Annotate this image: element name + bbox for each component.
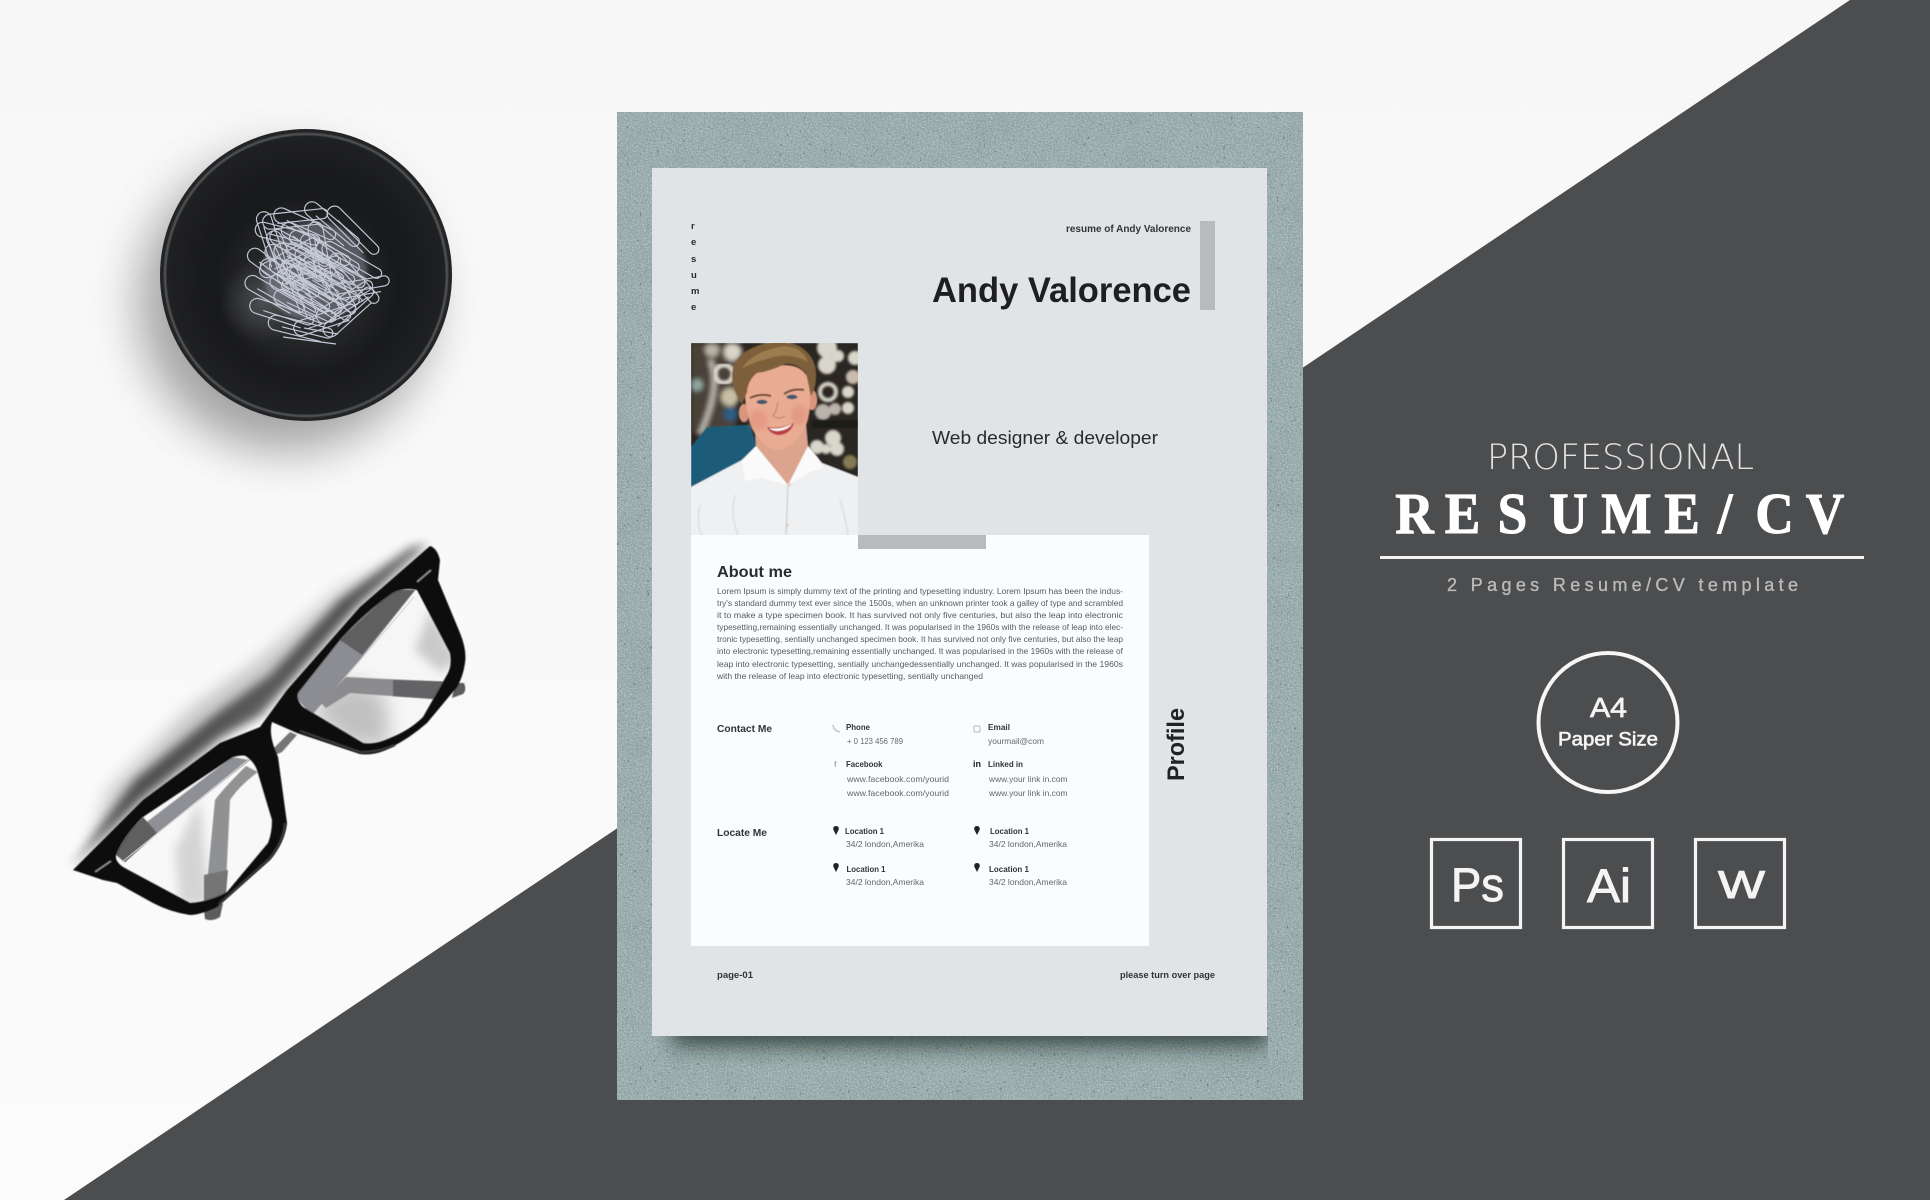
rivet highlights xyxy=(95,570,431,872)
vertical resume label: u xyxy=(691,270,697,281)
icon: pin 2 xyxy=(974,826,980,835)
lens shading and temple arms: left xyxy=(110,757,258,905)
paperclips xyxy=(242,199,391,344)
lower frame sheen xyxy=(219,731,395,904)
icon: Illustrator: Ai xyxy=(1587,859,1631,912)
locate me section: Locate Me xyxy=(717,827,767,839)
bowl inner xyxy=(167,136,445,414)
icon: black bowl of paperclips xyxy=(139,129,452,451)
badge: A4 paper size: A4 xyxy=(1590,692,1627,723)
concrete backdrop xyxy=(617,112,1303,1100)
smile xyxy=(767,423,794,435)
icon: Word: W xyxy=(1718,864,1765,907)
shirt shading xyxy=(698,495,848,535)
about text block: leap into electronic typesetting, sentially unchangedessentially unchanged. It was popularised in the 1960s xyxy=(717,659,1123,669)
accent bar xyxy=(1200,221,1215,310)
nose xyxy=(773,402,785,418)
frames xyxy=(73,546,465,915)
vertical resume label: r xyxy=(691,221,695,232)
cheeks xyxy=(749,410,767,430)
bowl body xyxy=(160,129,452,421)
vertical resume label: e xyxy=(691,302,696,313)
locate me section: Location 1 xyxy=(990,826,1029,836)
locate me section: 34/2 london,Amerika xyxy=(846,839,924,849)
title rule xyxy=(1380,556,1864,559)
contact me section: www.your link in.com xyxy=(988,788,1068,798)
icon: Photoshop xyxy=(1432,840,1520,928)
icon: Illustrator xyxy=(1564,840,1652,928)
icon: pin 4 xyxy=(974,863,980,872)
badge: A4 paper size xyxy=(1538,653,1678,792)
about text block: Lorem Ipsum is simply dummy text of the printing and typesetting industry. Lorem Ipsum has been the indus- xyxy=(717,586,1123,596)
contact me section: Linked in xyxy=(988,759,1023,769)
locate me section: Location 1 xyxy=(846,864,886,874)
background left xyxy=(691,343,742,435)
contact me section: Contact Me xyxy=(717,723,772,735)
about text block: typesetting,remaining essentially unchanged. It was popularised in the 1960s with the release of leap into elec- xyxy=(717,622,1123,632)
vertical resume label: s xyxy=(691,254,696,265)
contact me section: www.facebook.com/yourid xyxy=(846,788,949,798)
neck xyxy=(755,425,808,486)
vertical resume label: m xyxy=(691,286,699,297)
white content panel xyxy=(691,535,1149,946)
small caption: resume of Andy Valorence xyxy=(1066,223,1191,235)
title: resume/cv: RESUME/CV xyxy=(1395,482,1844,547)
locate me section xyxy=(717,826,1067,887)
about text block: try's standard dummy text ever since the 1500s, when an unknown printer took a galley of type and scrambled xyxy=(717,598,1123,608)
locate me section: 34/2 london,Amerika xyxy=(846,877,924,887)
icon: linkedin: in xyxy=(973,759,981,769)
lens interiors xyxy=(298,590,450,743)
badge: A4 paper size: Paper Size xyxy=(1558,730,1658,750)
vertical resume label xyxy=(691,221,699,313)
locate me section: Location 1 xyxy=(845,826,884,836)
face xyxy=(745,365,810,450)
contact me section: Phone xyxy=(846,722,870,732)
ears xyxy=(739,404,749,422)
teal jacket xyxy=(691,425,758,490)
about text block: it to make a type specimen book. It has survived not only five centuries, but also the leap into electronic xyxy=(717,610,1123,620)
contact me section: Email xyxy=(988,722,1010,732)
heading: about me: About me xyxy=(717,564,792,581)
subtitle: 2 Pages Resume/CV template xyxy=(1447,575,1798,595)
icon: facebook: f xyxy=(834,760,837,769)
icon: Word xyxy=(1696,840,1784,928)
paper shadow xyxy=(658,1036,1268,1062)
vertical heading: profile: Profile xyxy=(1163,708,1190,781)
contact me section: Facebook xyxy=(846,759,883,769)
lens shading and temple arms: right xyxy=(293,590,458,745)
title block xyxy=(1380,438,1864,595)
shirt xyxy=(691,458,858,535)
about text block xyxy=(716,586,1124,681)
bridge pads xyxy=(268,732,297,758)
footer: page number: page-01 xyxy=(717,970,753,980)
locate me section: Location 1 xyxy=(989,864,1029,874)
contact me section: yourmail@com xyxy=(988,736,1044,746)
icon: black eyeglasses xyxy=(70,543,465,920)
temple tips xyxy=(452,683,465,698)
background right bokeh xyxy=(810,338,862,469)
eyes xyxy=(756,400,768,404)
icon: pin 1 xyxy=(833,826,839,835)
grey tab xyxy=(858,535,986,549)
icon: pin 3 xyxy=(833,863,839,872)
collar xyxy=(742,446,788,485)
locate me section: 34/2 london,Amerika xyxy=(989,839,1067,849)
about text block: into electronic typesetting,remaining essentially unchanged. It was popularised in the 1960s with the release of xyxy=(717,646,1124,656)
name heading: Andy Valorence xyxy=(932,271,1191,310)
bowl rim xyxy=(165,134,447,416)
vertical resume label: e xyxy=(691,237,696,248)
icon: Photoshop: Ps xyxy=(1451,858,1504,911)
hair xyxy=(732,342,816,404)
icon: email xyxy=(974,726,980,732)
bowl shadow xyxy=(139,155,431,451)
footer: turn over note: please turn over page xyxy=(1120,970,1215,981)
icon: phone xyxy=(833,725,840,732)
contact me section: + 0 123 456 789 xyxy=(847,736,903,746)
contact me section xyxy=(717,722,1068,798)
portrait photo xyxy=(691,338,862,540)
bowl glow xyxy=(214,195,398,379)
about text block: tronic typesetting, sentially unchanged specimen book. It has survived not only five centuries, but also the leap xyxy=(717,634,1123,644)
about text block: with the release of leap into electronic typesetting, sentially unchanged xyxy=(716,671,983,681)
paper sheet xyxy=(652,168,1267,1036)
contact me section: www.facebook.com/yourid xyxy=(846,774,949,784)
job title: Web designer & developer xyxy=(932,427,1158,448)
contact me section: www.your link in.com xyxy=(988,774,1068,784)
title: professional: PROFESSIONAL xyxy=(1487,438,1754,478)
glasses shadow xyxy=(70,543,428,868)
brows xyxy=(750,390,804,398)
panel: resume mockup xyxy=(617,112,1303,1100)
locate me section: 34/2 london,Amerika xyxy=(989,877,1067,887)
